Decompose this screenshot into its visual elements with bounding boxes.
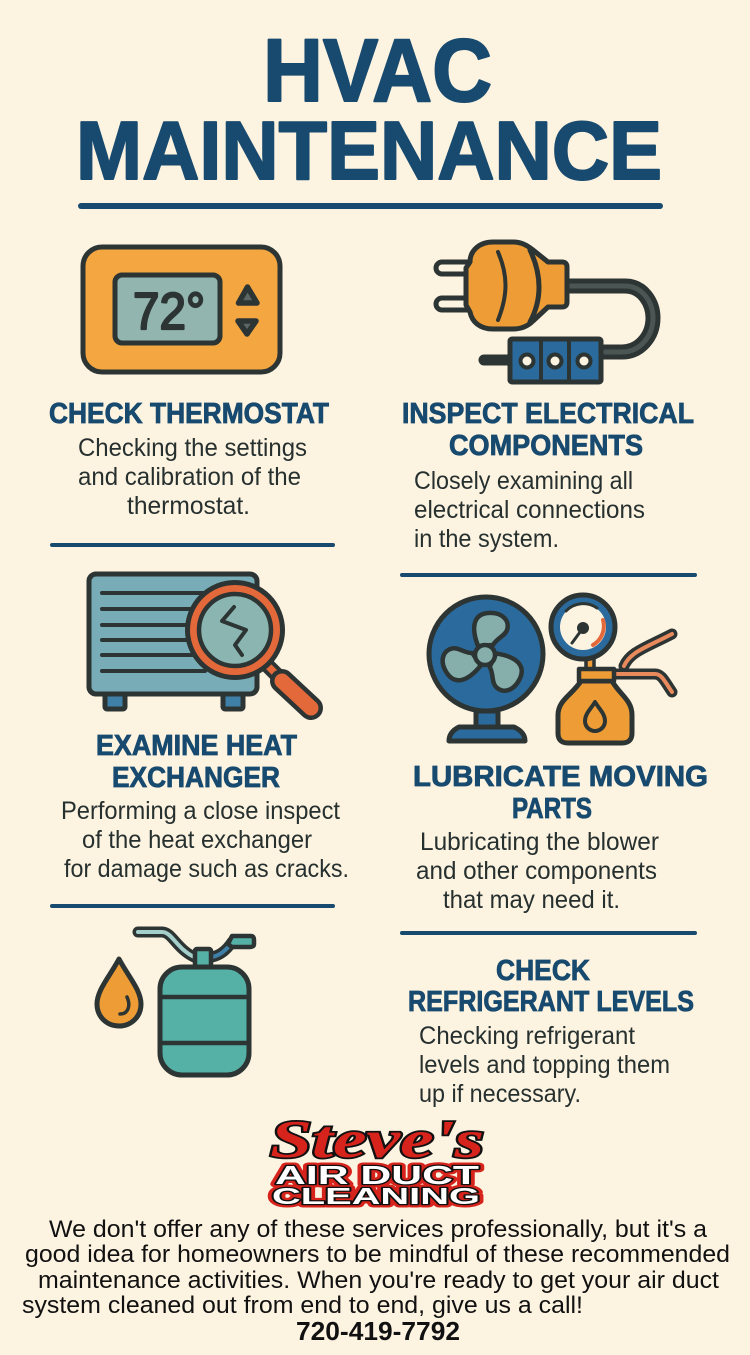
text: electrical description: in the system.: [414, 525, 559, 553]
heading: check refrigerant levels: REFRIGERANT LEVELS: [408, 986, 694, 1018]
panel: inspect electrical components: [402, 242, 694, 553]
text: heat exchanger description: Performing a close inspect: [61, 797, 340, 825]
logo: Steve's Air Duct Cleaning: AIR DUCT: [275, 1160, 479, 1190]
logo: Steve's Air Duct Cleaning: CLEANING: [272, 1183, 480, 1209]
text: refrigerant description: levels and topping them: [419, 1051, 670, 1079]
heading: check thermostat: CHECK THERMOSTAT: [49, 398, 330, 430]
logo: Steve's Air Duct Cleaning: CLEANING: [272, 1183, 480, 1209]
text: heat exchanger description: for damage such as cracks.: [64, 855, 349, 883]
text: check thermostat description: Checking the settings: [78, 434, 307, 462]
panel: check thermostat: [49, 247, 330, 520]
panel: lubricate moving parts: [413, 595, 708, 914]
logo: Steve's Air Duct Cleaning: AIR DUCT: [275, 1160, 479, 1190]
title: HVAC: [263, 20, 492, 120]
icon: thermostat: [83, 247, 280, 372]
heading: examine heat exchanger: EXCHANGER: [112, 762, 280, 794]
title: [76, 20, 662, 197]
heading: check refrigerant levels: CHECK: [496, 955, 590, 987]
icon: plug and terminal block: [436, 242, 653, 382]
text: electrical description: Closely examining all: [414, 467, 633, 495]
panel: examine heat exchanger: [61, 574, 349, 883]
text: heat exchanger description: [61, 797, 349, 883]
text: footer message: We don't offer any of these services professionally, but it's a: [49, 1216, 708, 1243]
icon: refrigerant tank and drop: [97, 932, 254, 1075]
title: MAINTENANCE: [76, 104, 662, 197]
text: refrigerant description: up if necessary.: [419, 1080, 581, 1108]
logo: Steve's Air Duct Cleaning: [270, 1111, 484, 1209]
heading: lubricate moving parts: [413, 761, 708, 825]
icon: thermostat: 72°: [133, 283, 205, 341]
text: footer message: good idea for homeowners to be mindful of these recommended: [25, 1241, 730, 1268]
text: lubrication description: that may need it.: [443, 886, 620, 914]
logo: Steve's Air Duct Cleaning: Steve's: [270, 1111, 484, 1169]
text: check thermostat description: and calibration of the: [78, 463, 301, 491]
text: lubrication description: and other components: [416, 857, 657, 885]
heading: inspect electrical components: INSPECT ELECTRICAL: [402, 398, 694, 430]
heading: check refrigerant levels: [408, 955, 694, 1018]
icon: heat exchanger with magnifier: [89, 574, 311, 709]
text: heat exchanger description: of the heat exchanger: [82, 826, 312, 854]
text: refrigerant description: [419, 1022, 670, 1108]
text: footer message: system cleaned out from end to end, give us a call!: [22, 1292, 583, 1319]
text: phone number: 720-419-7792: [296, 1318, 460, 1346]
text: check thermostat description: thermostat.: [127, 492, 250, 520]
panel: check refrigerant levels: [97, 932, 694, 1108]
text: check thermostat description: [78, 434, 307, 520]
text: electrical description: [414, 467, 645, 553]
text: lubrication description: [416, 828, 659, 914]
text: electrical description: electrical connections: [414, 496, 645, 524]
heading: lubricate moving parts: PARTS: [512, 793, 592, 825]
text: footer message: maintenance activities. When you're ready to get your air duct: [38, 1267, 719, 1294]
heading: inspect electrical components: [402, 398, 694, 462]
heading: examine heat exchanger: [96, 730, 298, 794]
heading: inspect electrical components: COMPONENTS: [449, 430, 643, 462]
heading: examine heat exchanger: EXAMINE HEAT: [96, 730, 298, 762]
text: refrigerant description: Checking refrigerant: [419, 1022, 635, 1050]
heading: lubricate moving parts: LUBRICATE MOVING: [413, 761, 708, 793]
icon: fan, gauge and oil can: [429, 595, 672, 743]
text: lubrication description: Lubricating the blower: [420, 828, 659, 856]
text: footer message: [22, 1216, 730, 1319]
